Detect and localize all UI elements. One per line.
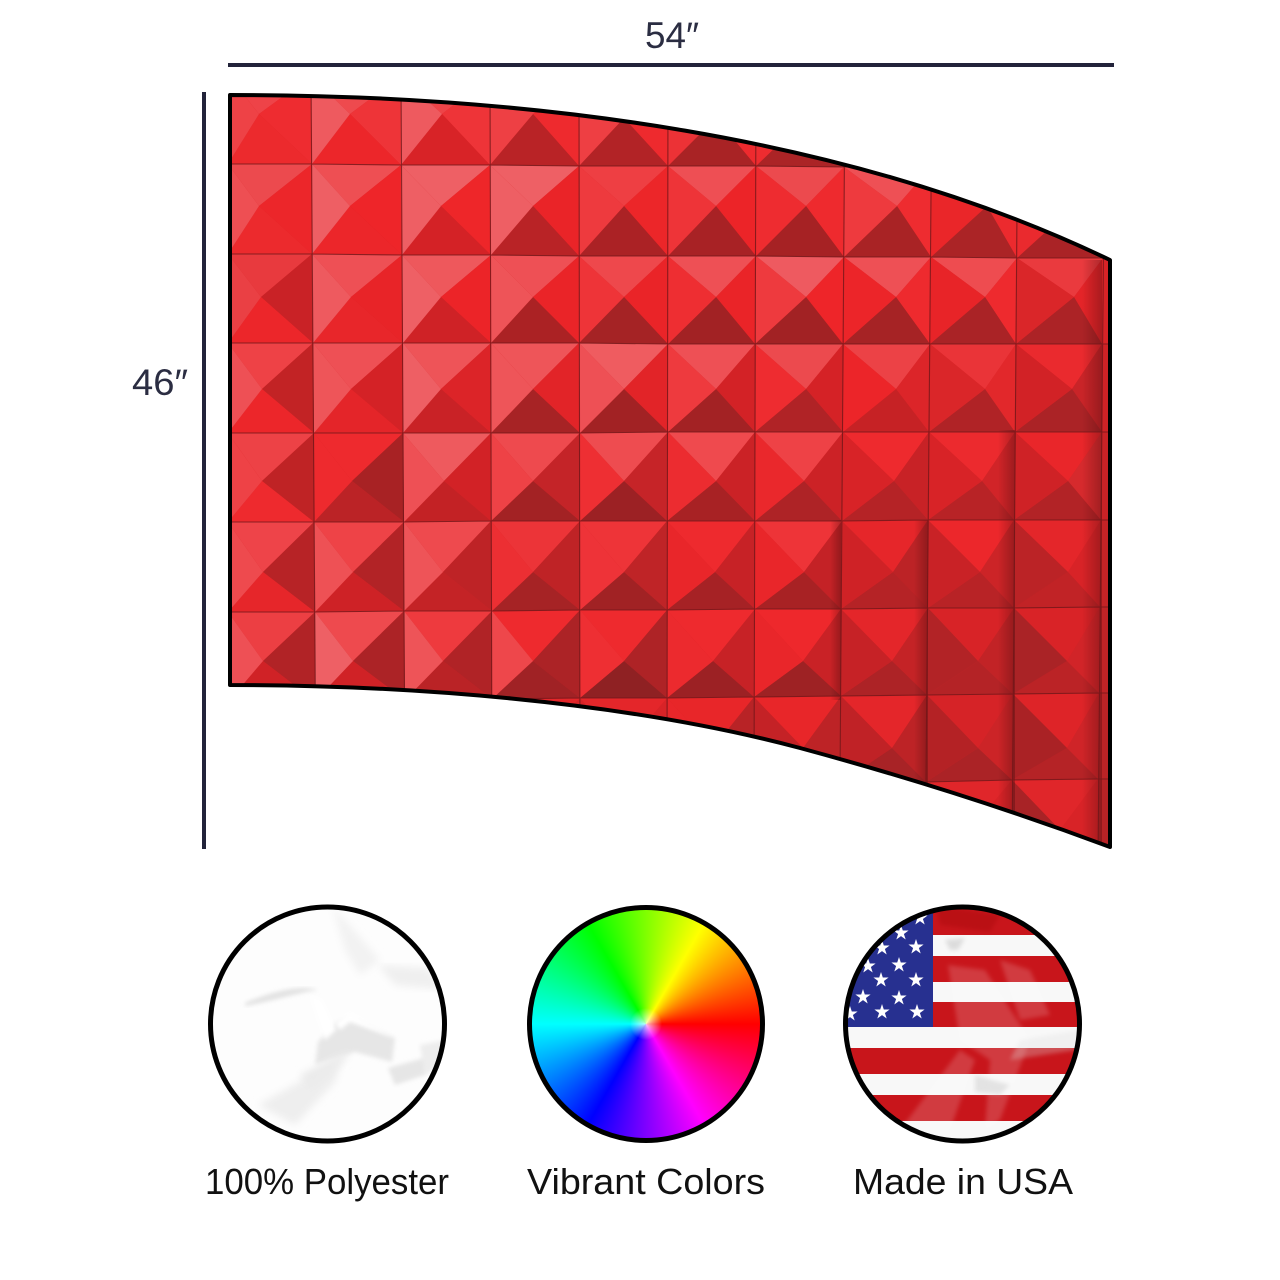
label: Vibrant Colors: Vibrant Colors (527, 1161, 765, 1202)
flag panel: red pyramid pattern swing flag (225, 75, 1115, 860)
icon: white polyester fabric circle (210, 905, 445, 1141)
icon: colour wheel circle (527, 905, 765, 1143)
dimension line: width (228, 63, 1114, 67)
icon: American flag circle (840, 900, 1090, 1150)
label: Made in USA: Made in USA (853, 1161, 1073, 1202)
dimension line: height (202, 92, 206, 849)
dimension label: height 46 inches: 46″ (132, 362, 188, 403)
label: 100% Polyester: 100% Polyester (205, 1161, 449, 1202)
dimension label: width 54 inches: 54″ (645, 15, 699, 56)
